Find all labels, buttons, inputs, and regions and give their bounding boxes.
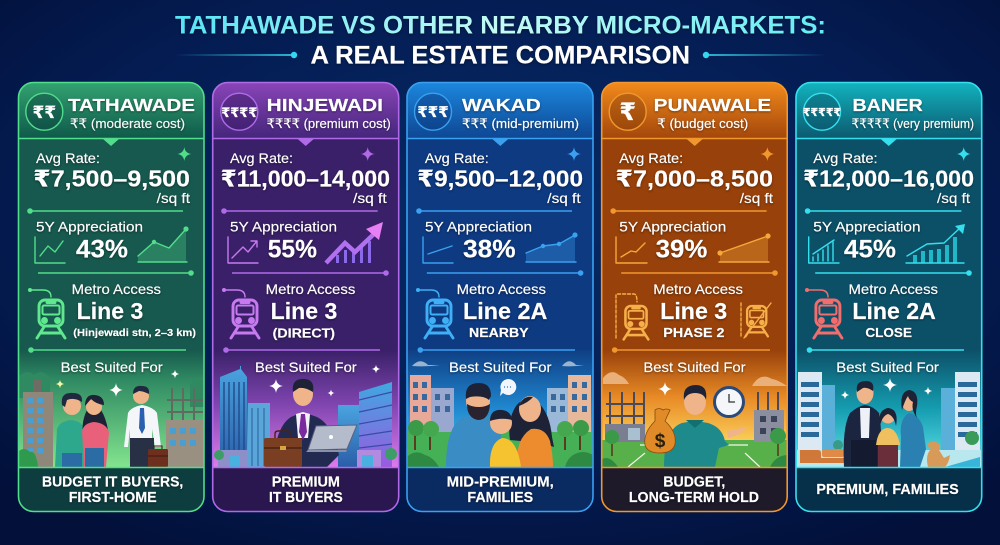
average rate: ₹7,500–9,500 (33, 166, 190, 192)
metro access: Line 3 (660, 298, 727, 324)
average rate: Avg Rate: (425, 150, 489, 166)
heading: ₹₹₹₹₹ (very premium) (852, 116, 974, 131)
panel: Punawale (601, 82, 788, 512)
heading: TATHAWADE (68, 95, 195, 115)
appreciation: 5Y Appreciation (619, 219, 726, 235)
average rate (417, 150, 583, 206)
average rate: ₹9,500–12,000 (417, 166, 583, 192)
buyer label (42, 475, 183, 506)
metro access: (DIRECT) (273, 326, 335, 341)
buyer label: BUDGET IT BUYERS, (42, 475, 183, 491)
average rate: /sq ft (547, 190, 581, 206)
card border and header rule (213, 82, 399, 512)
metro access: Line 2A (852, 298, 936, 324)
divider dots (610, 208, 778, 353)
heading: ₹₹ (moderate cost) (70, 116, 185, 131)
cost icon (609, 93, 646, 130)
metro access: CLOSE (865, 325, 912, 340)
average rate (616, 150, 773, 206)
heading: ₹ (budget cost) (657, 116, 748, 131)
average rate: Avg Rate: (230, 150, 293, 166)
triangle pointer (103, 139, 119, 146)
small line chart icon (228, 237, 258, 263)
average rate: ₹11,000–14,000 (221, 166, 390, 192)
heading: WAKAD (462, 95, 541, 115)
divider dots (805, 208, 972, 353)
cost icon (803, 93, 841, 130)
buyer label: PREMIUM, FAMILIES (816, 482, 959, 498)
best suited for: Best Suited For (61, 359, 163, 375)
average rate: ₹12,000–16,000 (803, 166, 974, 192)
card border and header rule (407, 82, 593, 512)
average rate: /sq ft (937, 190, 970, 206)
sparkle (177, 147, 191, 161)
cost icon: ₹ (619, 99, 636, 126)
average rate: ₹7,000–8,500 (616, 166, 773, 192)
metro access (805, 281, 938, 340)
card border and header rule (602, 82, 787, 512)
metro access: NEARBY (469, 325, 529, 340)
icon: train (222, 288, 259, 338)
heading: HINJEWADI (267, 95, 383, 115)
icon: train (805, 288, 842, 338)
buyer label (629, 475, 759, 506)
bar and arrow chart (906, 224, 965, 263)
illustration: family in park (407, 361, 593, 468)
heading (852, 95, 974, 131)
panel: Wakad (406, 82, 594, 512)
average rate (33, 150, 190, 206)
best suited for: Best Suited For (836, 359, 939, 375)
metro access: Line 2A (463, 298, 547, 324)
illustration: buyer with money bag and clock: $ (655, 431, 666, 452)
buyer label: FIRST-HOME (69, 490, 157, 506)
triangle pointer (881, 139, 897, 146)
average rate: /sq ft (353, 190, 387, 206)
buyer label: IT BUYERS (269, 490, 343, 506)
panel: Baner (795, 82, 983, 512)
appreciation: 5Y Appreciation (813, 219, 920, 235)
heading (654, 95, 771, 131)
triangle pointer (492, 139, 508, 146)
metro access: Line 3 (271, 298, 337, 324)
heading (68, 95, 195, 131)
average rate: Avg Rate: (813, 150, 878, 166)
appreciation (35, 219, 189, 264)
buyer label: PREMIUM (272, 475, 340, 491)
divider dots (221, 208, 389, 353)
illustration: buyer with money bag and clock (602, 372, 788, 468)
divider dots (27, 208, 194, 353)
cost icon: ₹₹₹₹₹ (803, 107, 841, 119)
appreciation: 5Y Appreciation (36, 219, 143, 235)
cost icon (26, 93, 63, 130)
best suited for: Best Suited For (643, 359, 746, 375)
illustration: executive with laptop and towers (214, 365, 397, 467)
metro access (28, 281, 196, 339)
cost icon: ₹₹₹₹ (221, 105, 257, 120)
area chart (138, 226, 189, 262)
appreciation: 55% (268, 236, 317, 264)
appreciation (809, 219, 965, 264)
icon: train (416, 288, 453, 338)
metro access: Metro Access (72, 281, 161, 297)
card border and header rule (18, 82, 204, 512)
sparkle (957, 147, 971, 161)
title (175, 12, 826, 70)
title: TATHAWADE VS OTHER NEARBY MICRO-MARKETS: (175, 12, 826, 40)
average rate (221, 150, 390, 206)
panel: Hinjewadi (212, 82, 399, 512)
appreciation: 38% (463, 236, 516, 264)
best suited for: Best Suited For (449, 359, 552, 375)
cost icon (414, 93, 452, 130)
heading (462, 95, 579, 131)
metro access: Metro Access (653, 281, 743, 297)
buyer label (269, 475, 343, 506)
heading: BANER (852, 95, 923, 115)
metro access: (Hinjewadi stn, 2–3 km) (73, 327, 196, 339)
best suited for: Best Suited For (255, 359, 357, 375)
metro access: PHASE 2 (663, 325, 724, 340)
bar and arrow chart (326, 222, 383, 263)
metro access (616, 281, 771, 340)
cost icon (221, 93, 258, 130)
appreciation: 5Y Appreciation (230, 219, 337, 235)
average rate: /sq ft (740, 190, 773, 206)
average rate: Avg Rate: (619, 150, 683, 166)
sparkle (760, 147, 774, 161)
icon: train and planned train (616, 294, 771, 339)
divider dots (416, 208, 583, 353)
panel: Tathawade (18, 82, 205, 512)
heading (267, 95, 391, 131)
area chart (526, 232, 578, 262)
small line chart icon (616, 237, 647, 263)
cost icon: ₹₹ (32, 103, 56, 122)
heading: PUNAWALE (654, 95, 771, 115)
appreciation: 5Y Appreciation (425, 219, 532, 235)
cost icon: ₹₹₹ (417, 104, 449, 121)
buyer label: FAMILIES (467, 490, 534, 506)
appreciation: 39% (656, 236, 707, 264)
metro access (222, 281, 355, 341)
appreciation (228, 219, 383, 264)
average rate: /sq ft (157, 190, 190, 206)
icon: train (28, 288, 65, 338)
buyer label: LONG-TERM HOLD (629, 490, 759, 506)
card border and header rule (796, 82, 982, 512)
sparkle (567, 147, 581, 161)
metro access: Metro Access (457, 281, 546, 297)
average rate (803, 150, 974, 206)
small line chart icon (35, 237, 65, 263)
triangle pointer (687, 139, 703, 146)
metro access (416, 281, 547, 340)
average rate: Avg Rate: (36, 150, 100, 166)
illustration: couple and office worker (18, 370, 205, 467)
metro access: Metro Access (848, 281, 938, 297)
title: A REAL ESTATE COMPARISON (310, 42, 690, 70)
area chart (717, 233, 771, 262)
appreciation: 43% (76, 236, 128, 264)
small line chart icon (423, 237, 453, 263)
illustration: premium family (797, 372, 981, 468)
metro access: Metro Access (266, 281, 355, 297)
buyer label (447, 475, 554, 506)
triangle pointer (298, 139, 314, 146)
metro access: Line 3 (77, 298, 143, 324)
heading: ₹₹₹₹ (premium cost) (267, 116, 391, 131)
appreciation: 45% (844, 236, 896, 264)
sparkle (361, 147, 375, 161)
heading: ₹₹₹ (mid-premium) (462, 116, 579, 131)
buyer label: BUDGET, (663, 475, 725, 491)
small bar chart icon (809, 237, 839, 263)
buyer label: MID-PREMIUM, (447, 475, 554, 491)
appreciation (423, 219, 578, 264)
appreciation (616, 219, 771, 264)
